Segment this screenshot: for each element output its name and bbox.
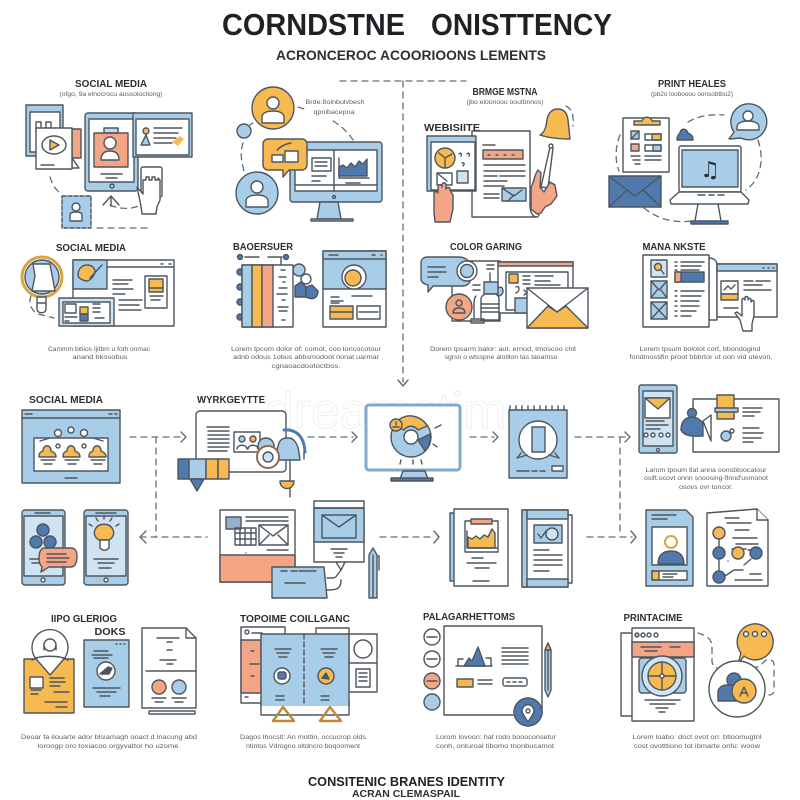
icon: orange profile circle [252,87,294,129]
icon: envelope [527,288,588,328]
heading line 2: DOKS [94,626,126,638]
icon: hand pointing [434,183,453,222]
icon: notebook cover [509,406,567,478]
caption: ntintos Vdrogno oltdncro boqooment [246,743,360,750]
caption [21,734,197,750]
icon: radial chart [391,416,441,464]
caption: fondinostifin proot bbbrtor ut oon vid utevon. [630,354,773,361]
heading: PALAGARHETTOMS [423,611,515,623]
heading: SOCIAL MEDIA [29,394,103,406]
connector: top dashed line and down arrow [340,81,466,386]
icon: bell [540,106,573,139]
caption [430,346,576,361]
icon: back base [261,700,349,715]
icon: small card [59,298,114,326]
icon: blue dots [238,254,288,260]
icon: tablet with envelope [639,385,677,453]
panel: social media top left [26,78,192,228]
heading: SOCIAL MEDIA [75,78,147,90]
caption [630,346,773,361]
icon: flow sheet [707,509,768,586]
heading: PRINTACIME [624,612,682,624]
icon: orange speech bubble [263,139,307,177]
panel: social media window [22,394,120,483]
subtitle: ACRONCEROC ACOORIOONS LEMENTS [276,48,546,63]
caption: osift.ucovt onnn snoosing-flnnd'usmonot [644,475,768,482]
caption: (ofgo, 9a elnocrocu aussoloctiong) [60,91,162,98]
panel: print active [621,612,774,750]
text: dreamstime [265,383,535,439]
panel: wyrkgeytte [178,394,305,497]
icon: blue split panel [261,634,349,706]
panel: social media row two [22,242,174,361]
panel: info blog docs [21,613,197,750]
icon: blue card [84,640,129,707]
icon: browser window [22,410,120,483]
icon: hand on phone [137,167,162,214]
footer title: ACRAN CLEMASPAIL [352,789,460,800]
icon: video card [36,128,81,169]
icon: dashed profile box [62,196,91,228]
icon: triangles [273,707,341,721]
icon: person badge [390,419,402,431]
icon: colour swatch bar [178,459,229,491]
icon: tabs above book [245,257,282,265]
caption: Lorom lovoon: hat rodo boooconsetur [436,734,557,741]
caption [231,346,382,370]
icon: orange folder with pin [24,630,74,713]
caption: Lorem tpsum bolotot cort, bbondogind [640,346,761,353]
icon: orange chat bubble [737,624,773,664]
icon: tablet with profile [85,113,138,191]
caption line 2: qpnibacepna [314,109,355,116]
icon: envelope card [314,501,364,562]
panel: typography compliance [240,613,377,750]
icon: colour window [323,251,386,327]
caption: Cammm bitiios Ijitbm u foth onmac [48,346,151,353]
icon: salmon person circle [446,294,472,320]
footer title: CONSITENIC BRANES IDENTITY [308,774,505,789]
caption: Deoar fa ilouarte ador blsiamagh ooact d lnacung abd [21,734,197,741]
connector: dashed arc [50,177,152,228]
icon: bell and seal [257,430,305,497]
heading: SOCIAL MEDIA [56,242,126,254]
panel: mana nkste [630,241,777,361]
connector: row three arrows [130,432,636,543]
heading: TOPOIME COILLGANC [240,613,350,625]
connector dashes [241,107,353,171]
icon: small blue circle [237,124,251,138]
title: CORNDSTNE [222,7,405,42]
caption: cgnaoacdootoctbos. [272,363,341,370]
panel: brand people and monitor [236,87,382,221]
icon: article window [73,260,174,326]
icon: right side panel [349,634,377,692]
icon: laptop with music [670,146,749,224]
icon: small blue figure [677,129,693,140]
icon: hand holding pen [531,144,557,214]
icon: browser window [498,262,573,313]
connector dashed ring [616,115,761,222]
panel: monitor with chart [366,405,460,481]
panel: print media laptop [609,78,767,224]
icon: bottle and cup [471,282,503,323]
caption: cost ovotttiono tot ibmarte onfu: woow [634,743,760,750]
panel: report pages [450,509,572,587]
icon: report with chart [450,509,508,586]
icon: blue profile circle [236,172,278,214]
title: ONISTTENCY [431,7,612,42]
icon: profile window [133,113,192,157]
icon: desktop monitor chart [290,142,382,221]
panel: color garing [421,241,588,361]
heading: MANA NKSTE [642,241,706,253]
caption: sgrsn o wtsspne alotilon tas taoamso [444,354,558,361]
icon: monitor [366,405,460,481]
icon: badge with jug [22,257,62,318]
title [222,7,612,42]
icon: window with hand [717,264,777,331]
icon: browser window with globe [427,136,476,191]
icon: pen [369,548,379,598]
icon: person with megaphone [681,408,711,441]
panel: centre documents [220,501,379,598]
heading: IIPO GLERIOG [51,613,117,625]
icon: poster page [632,628,694,721]
icon: option circles [424,629,440,710]
caption: Dorem tpsarm balor: aut. ernod, tmoscoo chit [430,346,576,353]
caption: (pb2o loobooou oonsobtbu2) [651,91,733,98]
caption: Lorem loabo: doct ovot on: btloomugtnl [632,734,762,741]
icon: back window [26,105,63,156]
icon: profile card [646,510,693,586]
icon: window document [196,411,286,472]
caption [240,734,367,750]
caption: adnb odous 1obus abbsmodoot nonat uarmar [233,354,380,361]
heading: PRINT HEALES [658,78,726,90]
icon: pen [545,643,551,697]
caption: anand bkosobus [72,354,128,361]
icon: clipboard [623,117,669,172]
icon: laptop with music: ♫ [700,158,720,183]
icon: document [142,628,196,714]
caption [436,734,557,750]
panel: notebook [509,406,567,478]
panel: profile card and flow sheet [646,509,768,586]
caption: osovs ovr toncor. [679,484,733,491]
heading: BAOERSUER [233,241,293,253]
icon: chat bubble with lens [421,257,477,292]
caption: Lorem tpcom dolor of: comot, coo loncocotour [231,346,382,353]
icon: book page [522,510,572,587]
icon: back top page [316,628,349,636]
icon: back sheet [452,261,500,321]
icon: location pin circle [514,698,542,726]
caption: Dagos lhocstl: An mottin, occucrop olds [240,734,367,741]
caption [632,734,762,750]
caption: Larom tpoum tlat anna oonsbtoocatour [646,467,767,474]
icon: people circle with compass [709,661,765,717]
caption [48,346,151,361]
icon: content panel [444,626,542,715]
label: WEBISIITE [424,122,480,134]
icon: phone with chat [22,510,77,585]
panel: tablet and profile sheet [639,385,779,491]
arrow up [103,196,119,206]
heading: BRMGE MSTNA [472,87,538,98]
panel: paragraph items [423,611,557,750]
heading: COLOR GARING [450,241,522,253]
icon: document list [643,255,717,327]
icon: blue envelope [609,176,661,207]
heading: WYRKGEYTTE [197,394,265,406]
caption: (jbo eloonoou ooutbnnos) [466,99,544,106]
icon: laptop piece [272,562,345,598]
icon: phone with bulb [84,510,128,585]
caption: conh, onturoal tibomo tnonbucamot [436,743,554,750]
icon: back page [621,633,633,716]
footer title [308,774,505,800]
icon: page with table and envelope [220,510,295,582]
caption [644,467,768,491]
connector dashes [698,633,774,695]
panel: website and brand media [424,87,573,222]
icon: sheet [693,395,779,452]
panel: phones [22,510,128,585]
icon: profile speech bubble [729,104,767,140]
icon: people behind book [293,264,318,299]
icon: long document [472,131,540,217]
icon: left page [241,627,285,703]
caption: loroogp oro toxiacoo orgyvattor ho uzome [38,743,179,750]
icon: binder with colour stripes [237,265,293,327]
caption: Brde:8oinbulvbesh [306,99,365,106]
panel: brand user row two [231,241,386,370]
